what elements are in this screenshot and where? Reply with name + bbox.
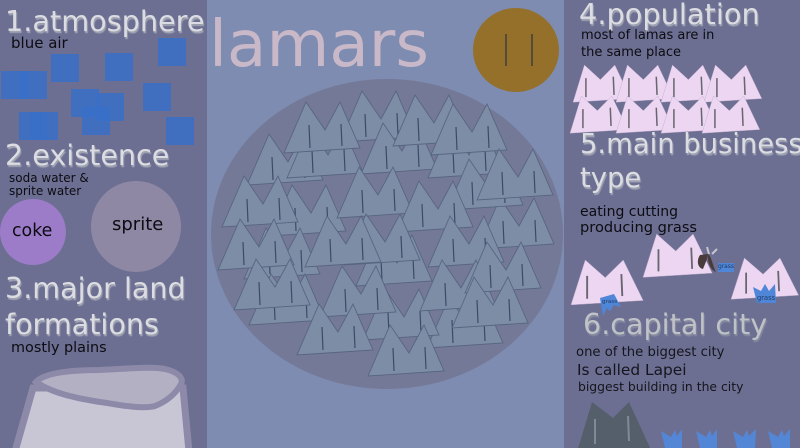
label: grass 1: grass bbox=[602, 299, 617, 305]
text: blue air: blue air bbox=[11, 34, 68, 52]
text: soda water bbox=[9, 171, 89, 198]
text: eating cutting: producing grass bbox=[580, 219, 697, 236]
icon: plains landform bbox=[12, 364, 192, 448]
heading: major land formations: formations bbox=[5, 307, 159, 341]
icon: sun bbox=[473, 8, 559, 92]
text: soda water: soda water & bbox=[9, 171, 89, 185]
heading: major land formations bbox=[5, 271, 186, 341]
heading: capital city: 6.capital city bbox=[583, 307, 767, 341]
icon: llama population group bbox=[570, 64, 762, 134]
heading: main business type bbox=[580, 129, 800, 196]
text: soda water: sprite water bbox=[9, 184, 81, 198]
icon: blue air squares bbox=[1, 38, 194, 145]
heading: major land formations: 3.major land bbox=[5, 271, 186, 305]
text: Is called Lapei: Is called Lapei bbox=[577, 361, 687, 379]
icon: biggest building bbox=[578, 402, 650, 448]
icon: coke circle bbox=[0, 199, 66, 265]
label: grass 2: grass bbox=[718, 264, 734, 270]
text: coke: coke bbox=[12, 221, 52, 241]
text: most of lamas bbox=[581, 28, 714, 60]
text: most of lamas: most of lamas are in bbox=[581, 28, 714, 43]
label: grass 3: grass bbox=[757, 294, 775, 302]
text: most of lamas: the same place bbox=[581, 45, 681, 60]
text: sprite: sprite bbox=[112, 214, 163, 235]
icon: llamas eating grass bbox=[570, 234, 799, 316]
text: biggest building: biggest building in the city bbox=[578, 379, 743, 394]
panel: right column bbox=[564, 0, 800, 448]
panel: left column bbox=[0, 0, 207, 448]
title: lamars bbox=[209, 7, 429, 82]
icon: sprite circle bbox=[91, 181, 181, 272]
icon: grass tufts bbox=[661, 429, 790, 448]
central map with llama herd bbox=[211, 79, 563, 389]
heading: existence: 2.existence bbox=[5, 138, 169, 172]
heading: atmosphere: 1.atmosphere bbox=[5, 4, 204, 38]
text: one of the biggest city: one of the biggest city bbox=[576, 345, 724, 360]
panel: central land bbox=[209, 7, 563, 389]
heading: main business type: type bbox=[580, 163, 641, 194]
text: eating cutting bbox=[580, 204, 697, 236]
text: mostly plains: mostly plains bbox=[11, 340, 107, 356]
heading: main business type: 5.main business bbox=[580, 129, 800, 160]
text: eating cutting: eating cutting bbox=[580, 204, 678, 220]
